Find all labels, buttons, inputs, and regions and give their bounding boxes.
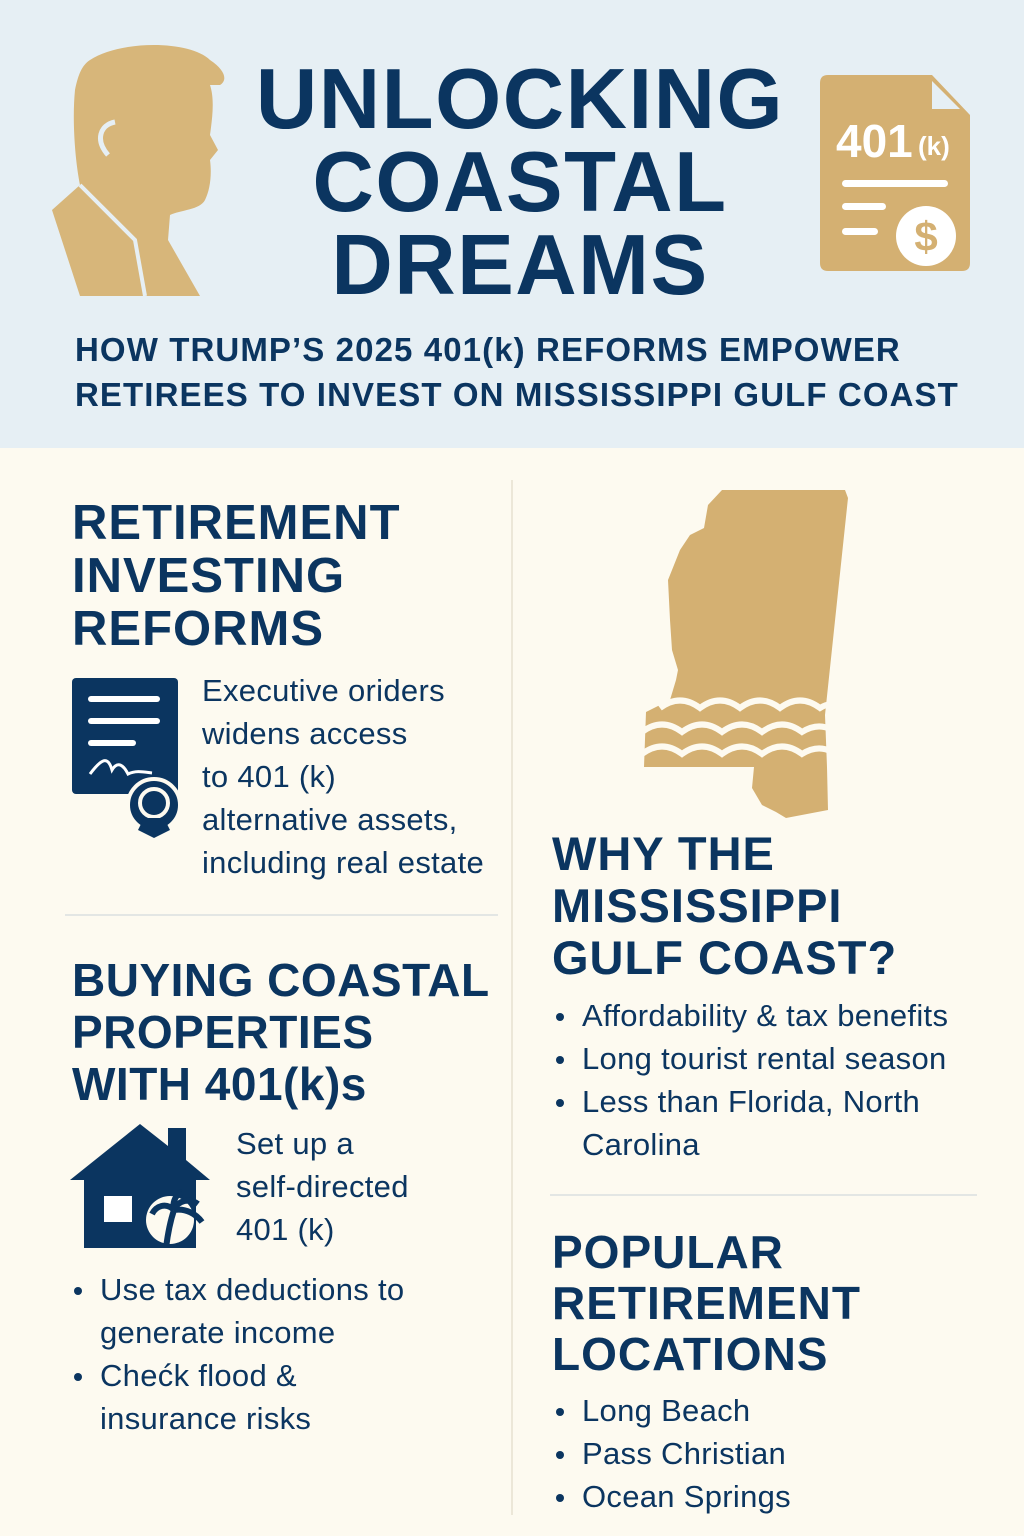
icon: executive order document: [72, 678, 178, 838]
title: [256, 52, 784, 313]
heading: reforms: INVESTING: [72, 549, 345, 603]
text: self-directed: 401 (k): [236, 1212, 335, 1247]
icon: mississippi map: [644, 490, 848, 818]
title: UNLOCKING: [256, 52, 784, 147]
list: reasons: Carolina: [582, 1127, 700, 1162]
heading: popular: LOCATIONS: [552, 1328, 828, 1380]
icon: 401k document: $: [914, 213, 938, 260]
icon: house with palm: [70, 1124, 210, 1248]
heading: why: WHY THE: [552, 827, 775, 880]
text: executive order: including real estate: [202, 845, 484, 880]
text: executive order: to 401 (k): [202, 759, 336, 794]
text: self-directed: [236, 1126, 409, 1247]
heading: reforms: [72, 496, 400, 656]
panel: why mississippi gulf coast: [552, 827, 948, 1162]
list: tips: generate income: [100, 1315, 335, 1350]
text: executive order: [202, 673, 484, 880]
title: COASTAL: [312, 135, 728, 230]
subtitle: RETIREES TO INVEST ON MISSISSIPPI GULF COAST: [75, 376, 959, 413]
list: tips: Chećk flood &: [100, 1358, 297, 1393]
list: reasons: Long tourist rental season: [582, 1041, 947, 1076]
heading: popular: POPULAR: [552, 1226, 784, 1278]
text: executive order: widens access: [202, 716, 408, 751]
heading: popular: RETIREMENT: [552, 1277, 861, 1329]
heading: buying: [72, 954, 490, 1110]
list: tips: [74, 1272, 404, 1436]
subtitle: [75, 331, 959, 413]
title: DREAMS: [331, 218, 709, 313]
icon: trump silhouette: [52, 45, 224, 296]
subtitle: HOW TRUMP’S 2025 401(k) REFORMS EMPOWER: [75, 331, 901, 368]
list: reasons: [556, 998, 948, 1162]
text: executive order: alternative assets,: [202, 802, 458, 837]
list: locations: Ocean Springs: [582, 1479, 791, 1514]
list: tips: insurance risks: [100, 1401, 311, 1436]
list: locations: Long Beach: [582, 1393, 750, 1428]
list: tips: Use tax deductions to: [100, 1272, 404, 1307]
icon: 401k document: (k): [918, 131, 950, 161]
icon: 401k document: [820, 75, 970, 271]
heading: buying: WITH 401(k)s: [72, 1058, 367, 1110]
heading: why: GULF COAST?: [552, 931, 897, 984]
heading: why: [552, 827, 897, 984]
text: executive order: Executive oriders: [202, 673, 445, 708]
text: self-directed: Set up a: [236, 1126, 354, 1161]
list: reasons: Less than Florida, North: [582, 1084, 920, 1119]
panel: buying coastal properties: [70, 954, 490, 1436]
heading: reforms: RETIREMENT: [72, 496, 400, 550]
heading: reforms: REFORMS: [72, 602, 324, 656]
heading: buying: PROPERTIES: [72, 1006, 374, 1058]
header band: [0, 0, 1024, 448]
text: self-directed: self-directed: [236, 1169, 409, 1204]
panel: popular retirement locations: [552, 1226, 861, 1514]
list: reasons: Affordability & tax benefits: [582, 998, 948, 1033]
list: locations: [556, 1393, 791, 1514]
heading: popular: [552, 1226, 861, 1380]
heading: buying: BUYING COASTAL: [72, 954, 490, 1006]
list: locations: Pass Christian: [582, 1436, 786, 1471]
heading: why: MISSISSIPPI: [552, 879, 842, 932]
icon: 401k document: 401: [836, 115, 913, 167]
panel: retirement investing reforms: [72, 496, 484, 880]
